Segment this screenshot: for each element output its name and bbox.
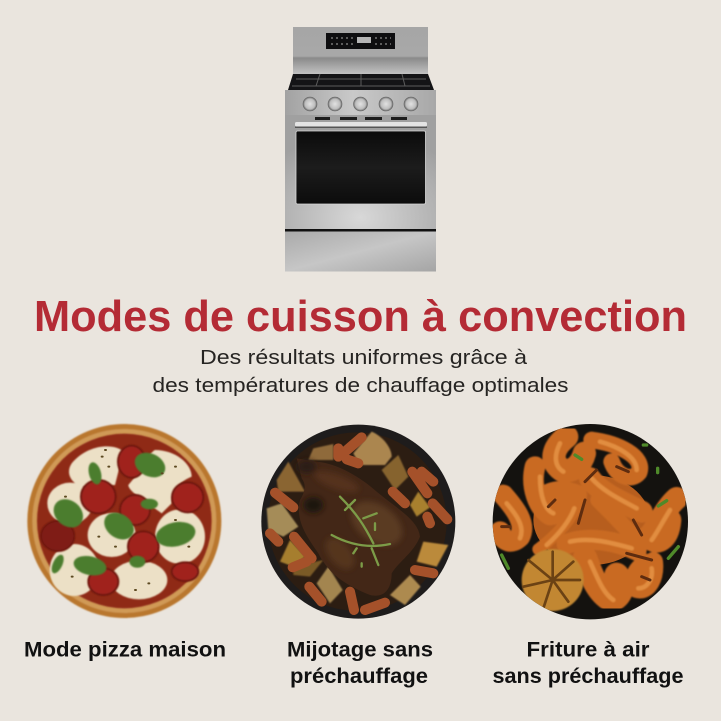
oven window <box>296 131 426 204</box>
beef highlights <box>297 460 410 574</box>
photo: braised beef stew <box>261 425 455 619</box>
title: Modes de cuisson à convection <box>34 293 687 341</box>
carrots <box>270 437 447 610</box>
central mass <box>533 475 650 565</box>
label: air frying: Friture à air <box>526 638 650 662</box>
tomatoes <box>41 446 203 595</box>
stew contents <box>267 432 448 611</box>
door handle <box>295 122 427 128</box>
storage drawer <box>285 232 436 272</box>
photo: homemade pizza <box>27 424 221 618</box>
label: slow cooking: préchauffage <box>290 664 428 688</box>
subtitle: Des résultats uniformes grâce à <box>200 346 528 369</box>
sauce <box>37 434 212 608</box>
subtitle: des températures de chauffage optimales <box>152 374 568 397</box>
pot <box>261 425 455 619</box>
label: slow cooking <box>287 638 433 688</box>
label: air frying: sans préchauffage <box>492 664 684 688</box>
mozzarella <box>47 446 205 599</box>
broth <box>268 432 447 611</box>
door vents <box>315 117 407 120</box>
green herbs <box>502 445 678 568</box>
thyme sprig <box>332 497 390 567</box>
basil leaves <box>48 448 198 578</box>
subtitle <box>152 346 568 397</box>
photo: air-fried shrimp <box>493 424 688 619</box>
illustration: kitchen range <box>285 27 436 272</box>
dark seams between shrimp <box>502 467 652 580</box>
control display <box>326 33 395 49</box>
crust <box>27 424 221 618</box>
pan <box>493 424 688 619</box>
cooktop grates <box>288 74 434 90</box>
label: pizza mode: Mode pizza maison <box>24 638 226 662</box>
knobs <box>303 97 418 111</box>
shrimp bodies <box>500 437 677 600</box>
control panel <box>285 90 436 115</box>
shrimp pile <box>500 437 678 611</box>
label: slow cooking: Mijotage sans <box>287 638 433 662</box>
beef <box>297 458 420 596</box>
shrimp highlights <box>507 442 670 600</box>
drawer gap <box>285 229 436 232</box>
range backguard <box>293 27 428 74</box>
roasted garlic <box>522 549 584 611</box>
oregano specks <box>65 450 189 590</box>
oven door <box>285 115 436 229</box>
potatoes <box>267 432 448 605</box>
label: air frying <box>492 638 684 688</box>
